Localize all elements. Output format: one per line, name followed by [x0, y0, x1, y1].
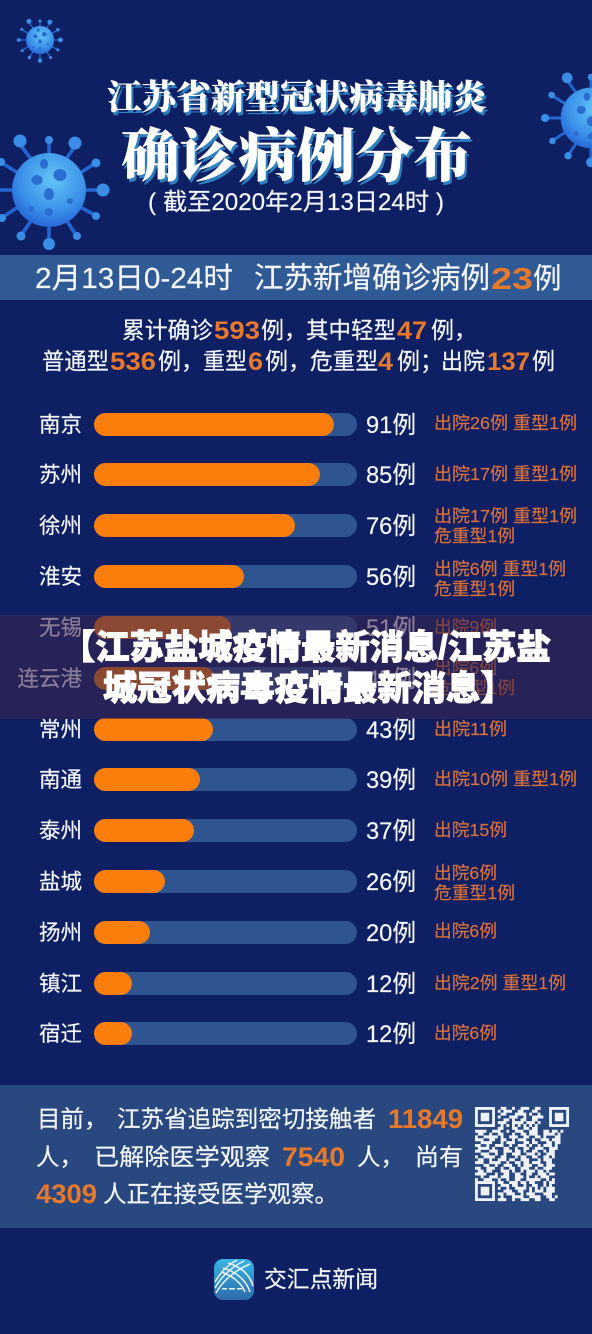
row: 南通: 出院10例 重型1例	[434, 769, 577, 789]
row: 扬州: 扬州	[39, 921, 82, 945]
bar chart: cases by city	[17, 412, 577, 1048]
row: 镇江: 出院2例 重型1例	[434, 973, 566, 993]
row: 徐州	[39, 506, 577, 546]
icon: logo	[214, 1259, 254, 1300]
text block: cumulative totals: 其中轻型	[306, 317, 396, 343]
text block: close contact summary: 已解除医学观察	[94, 1144, 270, 1170]
text block: close contact summary: 江苏省追踪到密切接触者	[117, 1106, 376, 1132]
text block: cumulative totals: 例，	[431, 317, 477, 343]
row: 连云港	[17, 658, 515, 698]
text block: cumulative totals: 593	[214, 317, 260, 345]
text block: cumulative totals: 6	[248, 348, 263, 376]
row: 南通: 南通	[39, 768, 82, 792]
row: 淮安: 危重型1例	[434, 579, 515, 599]
text block: cumulative totals	[42, 317, 555, 376]
row: 盐城: 26例	[366, 869, 416, 896]
QR code	[475, 1107, 569, 1201]
row: 淮安: 出院6例 重型1例	[434, 559, 566, 579]
text block: close contact summary	[36, 1104, 463, 1209]
row: 扬州	[39, 920, 497, 947]
row: 苏州	[39, 462, 577, 489]
text block: close contact summary: 人，	[36, 1144, 83, 1170]
row: 徐州: 徐州	[39, 514, 82, 538]
subtitle: date: )	[436, 189, 444, 216]
row: 扬州: 出院6例	[434, 921, 497, 941]
row: 连云港: 45例	[366, 666, 416, 693]
text block: close contact summary: 7540	[282, 1142, 345, 1172]
panel: daily new cases: 江苏新增确诊病例	[254, 262, 490, 295]
text block: cumulative totals: 例	[532, 348, 555, 374]
overlay headline: 【江苏盐城疫情最新消息/江苏盐	[61, 628, 551, 667]
row: 连云港: 连云港	[17, 667, 82, 691]
row: 苏州: 苏州	[39, 463, 82, 487]
row: 徐州: 出院17例 重型1例	[434, 506, 577, 526]
panel: daily new cases: 23	[491, 261, 533, 296]
text block: close contact summary: 11849	[388, 1104, 463, 1134]
row: 常州: 出院11例	[434, 719, 507, 739]
title	[107, 70, 490, 193]
row: 泰州: 出院15例	[434, 820, 507, 840]
row: 南京: 出院26例 重型1例	[434, 413, 577, 433]
row: 泰州: 37例	[366, 818, 416, 845]
row: 苏州: 出院17例 重型1例	[434, 464, 577, 484]
brand name: 交汇点新闻	[264, 1266, 378, 1292]
icon: virus right	[541, 72, 592, 167]
row: 南通	[39, 767, 577, 794]
text block: cumulative totals: 47	[397, 317, 427, 345]
row: 盐城	[39, 863, 515, 903]
row: 无锡: 出院9例	[434, 617, 497, 637]
row: 镇江: 镇江	[39, 972, 82, 996]
row: 宿迁: 出院6例	[434, 1023, 497, 1043]
text block: close contact summary: 人，	[357, 1144, 404, 1170]
text block: cumulative totals: 137	[487, 348, 530, 376]
row: 扬州: 20例	[366, 920, 416, 947]
row: 常州: 43例	[366, 717, 416, 744]
title: 确诊病例分布	[121, 109, 472, 193]
row: 徐州: 危重型1例	[434, 526, 515, 546]
row: 泰州	[39, 818, 507, 845]
panel: close contacts	[0, 1085, 592, 1228]
row: 连云港: 危重型1例	[434, 678, 515, 698]
text block: cumulative totals: 例；	[397, 348, 443, 374]
panel: daily new cases	[0, 255, 592, 300]
row: 连云港: 出院6例	[434, 658, 497, 678]
row: 盐城: 盐城	[39, 870, 82, 894]
row: 南京: 91例	[366, 412, 416, 439]
row: 苏州: 85例	[366, 462, 416, 489]
text block: cumulative totals: 例，	[265, 348, 311, 374]
row: 常州: 常州	[39, 718, 82, 742]
subtitle: date: (	[148, 189, 156, 216]
text block: close contact summary: 4309	[36, 1179, 97, 1209]
row: 宿迁: 12例	[366, 1021, 416, 1048]
text block: close contact summary: 尚有	[415, 1144, 463, 1170]
row: 淮安: 淮安	[39, 565, 82, 589]
text block: close contact summary: 目前，	[37, 1106, 108, 1132]
text block: cumulative totals: 危重型	[310, 348, 378, 374]
title: 江苏省新型冠状病毒肺炎	[107, 70, 490, 119]
row: 泰州: 泰州	[39, 819, 82, 843]
text block: cumulative totals: 累计确诊	[122, 317, 213, 343]
text block: close contact summary: 人正在接受医学观察。	[103, 1181, 338, 1207]
panel: daily new cases: 例	[533, 263, 562, 295]
row: 常州	[39, 717, 507, 744]
text block: cumulative totals: 普通型	[42, 348, 109, 374]
row: 无锡	[39, 615, 497, 642]
subtitle: date: 截至2020年2月13日24时	[163, 189, 429, 216]
row: 无锡: 51例	[366, 615, 416, 642]
text block: cumulative totals: 4	[378, 348, 393, 376]
row: 镇江	[39, 971, 566, 998]
overlay banner	[0, 615, 592, 719]
row: 南京	[39, 412, 577, 439]
row: 无锡: 无锡	[39, 616, 82, 640]
text block: cumulative totals: 例，	[261, 317, 307, 343]
row: 镇江: 12例	[366, 971, 416, 998]
text block: cumulative totals: 重型	[203, 348, 247, 374]
icon: large virus left	[0, 134, 110, 250]
row: 淮安: 56例	[366, 564, 416, 591]
text block: cumulative totals: 536	[110, 348, 156, 376]
panel: daily new cases: 2月13日0-24时	[35, 262, 233, 295]
row: 南通: 39例	[366, 767, 416, 794]
row: 南京: 南京	[39, 413, 82, 437]
text block: cumulative totals: 例，	[158, 348, 204, 374]
row: 徐州: 76例	[366, 513, 416, 540]
row: 盐城: 出院6例	[434, 863, 497, 883]
text block: cumulative totals: 出院	[441, 348, 485, 374]
row: 宿迁: 宿迁	[39, 1022, 82, 1046]
icon: small virus top left	[17, 19, 63, 63]
row: 宿迁	[39, 1021, 497, 1048]
row: 淮安	[39, 559, 566, 599]
overlay headline	[61, 628, 551, 708]
row: 盐城: 危重型1例	[434, 883, 515, 903]
overlay headline: 城冠状病毒疫情最新消息】	[103, 669, 515, 708]
